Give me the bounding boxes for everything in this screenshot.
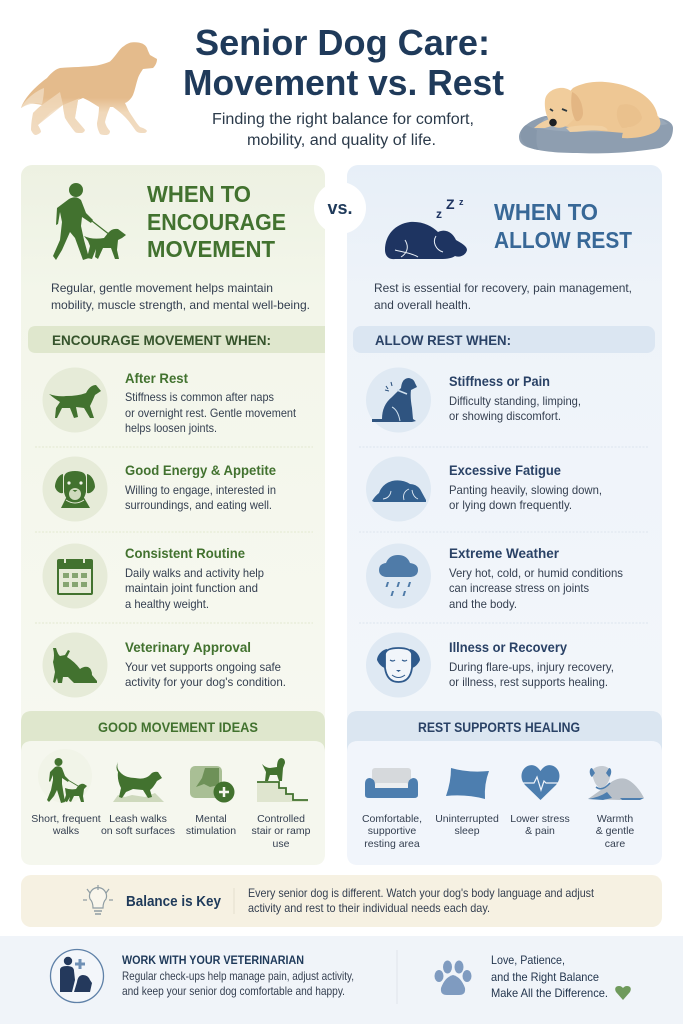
illustration: walking golden dog xyxy=(21,42,157,135)
item: consistent routine: Consistent Routine xyxy=(125,545,245,561)
idea: controlled stair or ramp use: use xyxy=(273,838,290,850)
intro text: and overall health. xyxy=(374,298,471,312)
subpanel: good movement ideas xyxy=(21,711,325,865)
text: love patience balance xyxy=(491,953,608,1000)
intro text: mobility, muscle strength, and mental well-being. xyxy=(51,298,310,312)
item: consistent routine: Daily walks and activity help xyxy=(125,566,264,580)
item: stiffness or pain xyxy=(366,368,581,432)
text: work with your veterinarian: Regular check-ups help manage pain, adjust activity, xyxy=(122,969,354,983)
idea: warmth and gentle care: Warmth xyxy=(597,813,633,825)
idea: short frequent walks: walks xyxy=(52,825,79,837)
item: veterinary approval: activity for your dog's condition. xyxy=(125,675,286,689)
text: work with your veterinarian: and keep your senior dog comfortable and happy. xyxy=(122,984,345,998)
callout: balance is key: Balance is Key xyxy=(126,893,222,910)
vs. badge: vs. xyxy=(327,198,353,218)
section bar: allow rest when xyxy=(353,326,655,353)
idea: short frequent walks: Short, frequent xyxy=(31,813,101,825)
idea: warmth and gentle care: care xyxy=(605,838,625,850)
idea: leash walks on soft surfaces: on soft surfaces xyxy=(101,825,175,837)
item: stiffness or pain: or showing discomfort. xyxy=(449,409,561,423)
item: illness or recovery: During flare-ups, injury recovery, xyxy=(449,660,614,674)
item: after rest xyxy=(42,368,297,435)
item: excessive fatigue: or lying down frequently. xyxy=(449,498,572,512)
text: love patience balance: Love, Patience, xyxy=(491,953,565,967)
heading: when to allow rest xyxy=(494,199,632,253)
idea: controlled stair or ramp use: stair or ramp xyxy=(252,825,311,837)
subtitle xyxy=(212,111,474,149)
icon: sleeping dog: z xyxy=(436,207,442,221)
item: illness or recovery xyxy=(366,632,614,698)
item: veterinary approval xyxy=(42,632,286,698)
idea: lower stress and pain: Lower stress xyxy=(510,813,570,825)
icon: lying dog xyxy=(372,480,426,502)
item: consistent routine xyxy=(42,544,264,611)
item: excessive fatigue xyxy=(366,456,602,522)
idea: warmth and gentle care: & gentle xyxy=(596,825,634,837)
idea: mental stimulation xyxy=(186,766,236,837)
subpanel: good movement ideas: GOOD MOVEMENT IDEAS xyxy=(98,720,258,735)
heading: when to encourage movement: WHEN TO xyxy=(147,181,251,207)
item: extreme weather: can increase stress on joints xyxy=(449,581,589,595)
idea: comfortable resting area: supportive xyxy=(368,825,416,837)
intro text xyxy=(51,281,310,312)
subtitle: mobility, and quality of life. xyxy=(247,132,436,149)
text: work with your veterinarian xyxy=(122,955,354,998)
item: illness or recovery: Illness or Recovery xyxy=(449,639,567,655)
idea: uninterrupted sleep: Uninterrupted xyxy=(435,813,499,825)
item: after rest: or overnight rest. Gentle movement xyxy=(125,406,297,420)
item: good energy and appetite xyxy=(42,456,276,522)
icon: sleeping dog: Z xyxy=(446,196,455,212)
idea: comfortable resting area: Comfortable, xyxy=(362,813,422,825)
callout: balance is key: activity and rest to their individual needs each day. xyxy=(248,901,490,915)
item: extreme weather: Extreme Weather xyxy=(449,545,560,561)
panel: encourage movement xyxy=(21,165,325,865)
illustration: golden dog on grey bed xyxy=(519,82,673,153)
idea: leash walks on soft surfaces: Leash walks xyxy=(109,813,167,825)
icon: calendar xyxy=(57,557,93,595)
vs. badge xyxy=(314,182,366,234)
intro text xyxy=(374,281,632,312)
title: Movement vs. Rest xyxy=(183,62,504,103)
panel: allow rest xyxy=(347,165,662,865)
subpanel: rest supports healing: REST SUPPORTS HEALING xyxy=(418,720,580,735)
icon: dog face xyxy=(55,471,95,508)
item: stiffness or pain: Difficulty standing, limping, xyxy=(449,394,581,408)
item: extreme weather xyxy=(366,544,623,611)
idea: mental stimulation: stimulation xyxy=(186,825,236,837)
idea: short frequent walks xyxy=(31,749,101,837)
heading: when to encourage movement: ENCOURAGE xyxy=(147,209,286,235)
idea: controlled stair or ramp use xyxy=(252,758,311,850)
icon: sleeping dog: z xyxy=(459,197,464,207)
callout: balance is key: Every senior dog is different. Watch your dog's body language and adjust xyxy=(248,886,595,900)
item: illness or recovery: or illness, rest supports healing. xyxy=(449,675,608,689)
section bar: encourage movement when: ENCOURAGE MOVEMENT WHEN: xyxy=(52,333,271,348)
icon: sitting dog xyxy=(372,378,417,422)
item: after rest: helps loosen joints. xyxy=(125,421,217,435)
icon: rain cloud xyxy=(379,555,418,596)
idea: comfortable resting area: resting area xyxy=(364,838,420,850)
idea: leash walks on soft surfaces xyxy=(101,762,175,837)
icon: paw print xyxy=(434,960,472,995)
icon: standing dog xyxy=(49,385,101,418)
heading: when to encourage movement: MOVEMENT xyxy=(147,236,275,262)
idea: controlled stair or ramp use: Controlled xyxy=(257,813,305,825)
item: excessive fatigue: Excessive Fatigue xyxy=(449,462,561,478)
idea: comfortable resting area xyxy=(362,768,422,850)
item: consistent routine: a healthy weight. xyxy=(125,597,209,611)
title: Senior Dog Care: xyxy=(195,22,490,63)
intro text: Regular, gentle movement helps maintain xyxy=(51,281,273,295)
idea: uninterrupted sleep xyxy=(435,768,499,837)
icon: person walking dog xyxy=(53,183,126,260)
icon: veterinarian with dog xyxy=(50,950,104,1002)
callout: balance is key xyxy=(21,875,662,927)
section bar: encourage movement when xyxy=(28,326,325,353)
text: love patience balance: and the Right Balance xyxy=(491,970,599,984)
title xyxy=(183,22,504,103)
subtitle: Finding the right balance for comfort, xyxy=(212,111,474,128)
item: good energy and appetite: surroundings, and eating well. xyxy=(125,498,272,512)
icon: play bow dog xyxy=(53,648,97,683)
subpanel: rest supports healing xyxy=(347,711,662,865)
item: excessive fatigue: Panting heavily, slowing down, xyxy=(449,483,602,497)
heading: when to allow rest: WHEN TO xyxy=(494,199,598,225)
idea: uninterrupted sleep: sleep xyxy=(454,825,480,837)
item: good energy and appetite: Good Energy & Appetite xyxy=(125,462,276,478)
heading: when to allow rest: ALLOW REST xyxy=(494,227,632,253)
icon: green heart xyxy=(615,986,631,1000)
text: love patience balance: Make All the Difference. xyxy=(491,986,608,1000)
item: after rest: After Rest xyxy=(125,370,188,386)
item: good energy and appetite: Willing to engage, interested in xyxy=(125,483,276,497)
item: after rest: Stiffness is common after naps xyxy=(125,390,274,404)
item: stiffness or pain: Stiffness or Pain xyxy=(449,373,550,389)
idea: lower stress and pain xyxy=(510,765,570,837)
icon: sleepy dog face xyxy=(377,648,420,682)
footer band xyxy=(0,936,683,1024)
item: extreme weather: and the body. xyxy=(449,597,517,611)
intro text: Rest is essential for recovery, pain management, xyxy=(374,281,632,295)
heading: when to encourage movement xyxy=(147,181,286,262)
idea: lower stress and pain: & pain xyxy=(525,825,555,837)
section bar: allow rest when: ALLOW REST WHEN: xyxy=(375,333,511,348)
item: extreme weather: Very hot, cold, or humid conditions xyxy=(449,566,623,580)
icon: light bulb xyxy=(83,885,113,914)
idea: mental stimulation: Mental xyxy=(195,813,227,825)
text: work with your veterinarian: WORK WITH YOUR VETERINARIAN xyxy=(122,955,304,967)
item: veterinary approval: Veterinary Approval xyxy=(125,639,251,655)
item: consistent routine: maintain joint function and xyxy=(125,581,258,595)
icon: sleeping dog xyxy=(385,196,467,259)
idea: warmth and gentle care xyxy=(588,766,644,850)
item: veterinary approval: Your vet supports ongoing safe xyxy=(125,660,281,674)
